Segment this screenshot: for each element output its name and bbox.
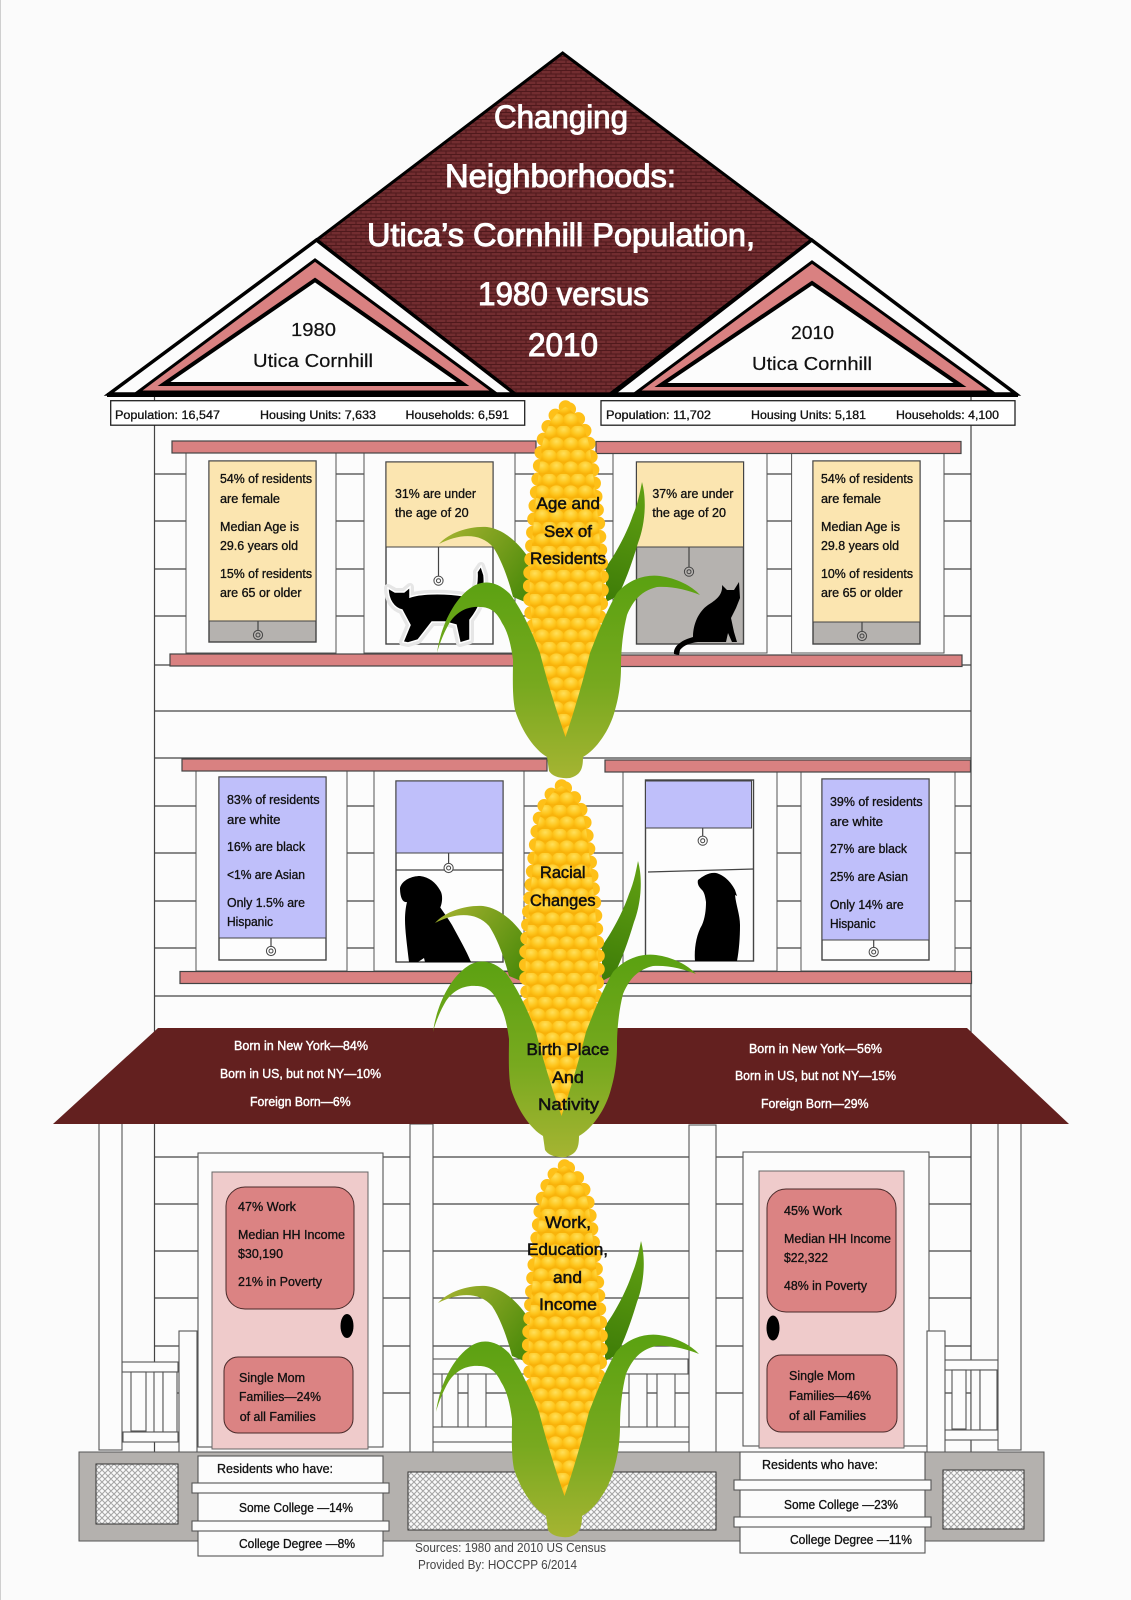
steps: education 1980: Residents who have: [217, 1462, 333, 1476]
steps: education 2010: College Degree —11% [790, 1533, 912, 1547]
panel: work and income 1980: Median HH Income [238, 1228, 345, 1242]
window with dog 2010 [646, 780, 754, 961]
birthplace 2010: Born in New York—56% [749, 1042, 882, 1056]
window: under 20 1980 with cat: the age of 20 [395, 506, 469, 520]
title: 1980 versus [478, 276, 649, 312]
window: sex and age 2010: 10% of residents [821, 567, 913, 581]
sources: Provided By: HOCCPP 6/2014 [418, 1558, 577, 1572]
left gable 1980 [109, 240, 515, 394]
door frames [198, 1152, 929, 1447]
birthplace 2010 [735, 1042, 896, 1111]
window: sex and age 2010: are female [821, 492, 881, 506]
panel: work and income 2010 [767, 1189, 896, 1312]
corn: age and sex of residents: Residents [530, 550, 606, 568]
corn: age and sex of residents [437, 407, 700, 778]
panel: single mom families 2010: Families—46% [789, 1389, 871, 1403]
window: race 1980 [219, 777, 326, 960]
window: race 1980: Only 1.5% are [227, 896, 305, 910]
window: under 20 1980 with cat: 31% are under [395, 487, 476, 501]
steps: education 2010: Some College —23% [784, 1498, 898, 1512]
panel: work and income 2010: 45% Work [784, 1204, 843, 1218]
stats bar 2010: Population: 11,702 [606, 408, 711, 422]
corn: work, education and income: Education, [527, 1241, 608, 1259]
corn: racial changes [433, 786, 696, 1157]
upper lintels and sills [170, 441, 962, 666]
window: sex and age 1980: 29.6 years old [220, 539, 298, 553]
window: sex and age 1980: 54% of residents [220, 472, 312, 486]
sources: Sources: 1980 and 2010 US Census [415, 1541, 606, 1555]
panel: work and income 1980: 47% Work [238, 1200, 297, 1214]
window: race 2010: Hispanic [830, 917, 876, 931]
window: race 1980: are white [227, 813, 281, 827]
birthplace 1980 [220, 1039, 381, 1109]
window: race 1980: 83% of residents [227, 793, 320, 807]
porch columns and railings [99, 1122, 1021, 1453]
door 1980 [212, 1172, 368, 1449]
window: race 1980: Hispanic [227, 915, 273, 929]
title: 2010 [528, 327, 598, 363]
window: sex and age 2010: 54% of residents [821, 472, 913, 486]
window: sex and age 1980: 15% of residents [220, 567, 312, 581]
corn: work, education and income: and [553, 1269, 582, 1287]
gable label 2010 [752, 323, 872, 374]
gable label 1980 [253, 320, 373, 371]
lower lintels and sills [180, 759, 972, 984]
steps: education 1980 [192, 1456, 389, 1556]
window: under 20 2010 with cat: 37% are under [652, 487, 733, 501]
window: sex and age 2010: 29.8 years old [821, 539, 899, 553]
window: race 2010: are white [830, 815, 883, 829]
stats bar 1980: Housing Units: 7,633 [260, 408, 376, 422]
corn: racial changes: Racial [540, 864, 586, 882]
icon: cat silhouette 2010 [674, 582, 740, 655]
porch roof with birthplace text [53, 1028, 1069, 1124]
panel: single mom families 2010: Single Mom [789, 1369, 855, 1383]
house wall with siding [154, 395, 971, 1455]
gable label 2010: Utica Cornhill [752, 354, 872, 374]
gable label 1980: Utica Cornhill [253, 351, 373, 371]
window: sex and age 2010 [813, 461, 920, 644]
title [367, 99, 755, 363]
window: sex and age 1980 [209, 461, 316, 642]
corn: work, education and income: Work, [545, 1214, 591, 1232]
window: under 20 2010 with cat [636, 462, 744, 655]
window with dog 1980 [396, 781, 503, 962]
panel: single mom families 2010 [767, 1355, 897, 1432]
steps: education 1980: Some College —14% [239, 1501, 353, 1515]
label: birth place and nativity: Birth Place [526, 1041, 609, 1059]
icon: dog silhouette 1980 [400, 876, 471, 962]
stats bar 2010: Households: 4,100 [896, 408, 999, 422]
door 2010 [759, 1171, 904, 1448]
window: sex and age 1980: are 65 or older [220, 586, 302, 600]
window: sex and age 2010: are 65 or older [821, 586, 902, 600]
panel: single mom families 1980: of all Families [240, 1410, 316, 1424]
sources [415, 1541, 606, 1572]
window: under 20 2010 with cat: the age of 20 [652, 506, 726, 520]
upper floor window frames [186, 453, 944, 653]
title: Neighborhoods: [445, 158, 676, 194]
title: Changing [494, 99, 628, 135]
label: birth place and nativity [526, 1041, 609, 1114]
icon: cat silhouette 1980 [388, 566, 484, 643]
birthplace 2010: Foreign Born—29% [761, 1097, 868, 1111]
stats bar 1980: Population: 16,547 [115, 408, 220, 422]
panel: work and income 1980: $30,190 [238, 1247, 283, 1261]
stats bar 1980 [111, 401, 525, 425]
window: sex and age 1980: are female [220, 492, 280, 506]
window: race 2010: Only 14% are [830, 898, 904, 912]
corn: racial changes: Changes [530, 892, 596, 910]
window: race 2010: 25% are Asian [830, 870, 908, 884]
panel: work and income 2010: Median HH Income [784, 1232, 891, 1246]
stats bar 2010: Housing Units: 5,181 [751, 408, 866, 422]
birthplace 1980: Born in US, but not NY—10% [220, 1067, 381, 1081]
gable label 1980: 1980 [291, 320, 336, 340]
right gable 2010 [613, 240, 1016, 394]
birthplace 2010: Born in US, but not NY—15% [735, 1069, 896, 1083]
corn: age and sex of residents: Sex of [544, 523, 592, 541]
window: sex and age 1980: Median Age is [220, 520, 299, 534]
gable label 2010: 2010 [791, 323, 834, 343]
title: Utica’s Cornhill Population, [367, 217, 755, 253]
window: sex and age 2010: Median Age is [821, 520, 900, 534]
corn: work, education and income: Income [539, 1296, 597, 1314]
window: race 1980: <1% are Asian [227, 868, 305, 882]
birthplace 1980: Born in New York—84% [234, 1039, 368, 1053]
window: race 2010 [822, 779, 929, 960]
panel: work and income 1980 [226, 1187, 354, 1309]
birthplace 1980: Foreign Born—6% [250, 1095, 351, 1109]
lower floor window frames [196, 771, 955, 971]
steps: education 2010: Residents who have: [762, 1458, 878, 1472]
label: birth place and nativity: And [552, 1069, 584, 1087]
window: race 1980: 16% are black [227, 840, 306, 854]
panel: single mom families 1980 [224, 1357, 353, 1433]
corn: age and sex of residents: Age and [536, 495, 600, 513]
panel: single mom families 1980: Families—24% [239, 1390, 321, 1404]
panel: single mom families 2010: of all Families [789, 1409, 866, 1423]
icon: dog silhouette 2010 [695, 873, 740, 961]
steps: education 1980: College Degree —8% [239, 1537, 355, 1551]
panel: work and income 2010: 48% in Poverty [784, 1279, 868, 1293]
stats bar 2010 [601, 401, 1015, 425]
panel: work and income 1980: 21% in Poverty [238, 1275, 323, 1289]
steps: education 2010 [734, 1452, 931, 1553]
panel: single mom families 1980: Single Mom [239, 1371, 305, 1385]
corn: work, education and income [436, 1166, 699, 1537]
window: race 2010: 27% are black [830, 842, 908, 856]
window: race 2010: 39% of residents [830, 795, 923, 809]
main roof gable with title [316, 53, 812, 394]
stats bar 1980: Households: 6,591 [406, 408, 509, 422]
label: birth place and nativity: Nativity [538, 1096, 600, 1114]
panel: work and income 2010: $22,322 [784, 1251, 828, 1265]
window: under 20 1980 with cat [386, 462, 493, 644]
foundation [79, 1452, 1044, 1541]
